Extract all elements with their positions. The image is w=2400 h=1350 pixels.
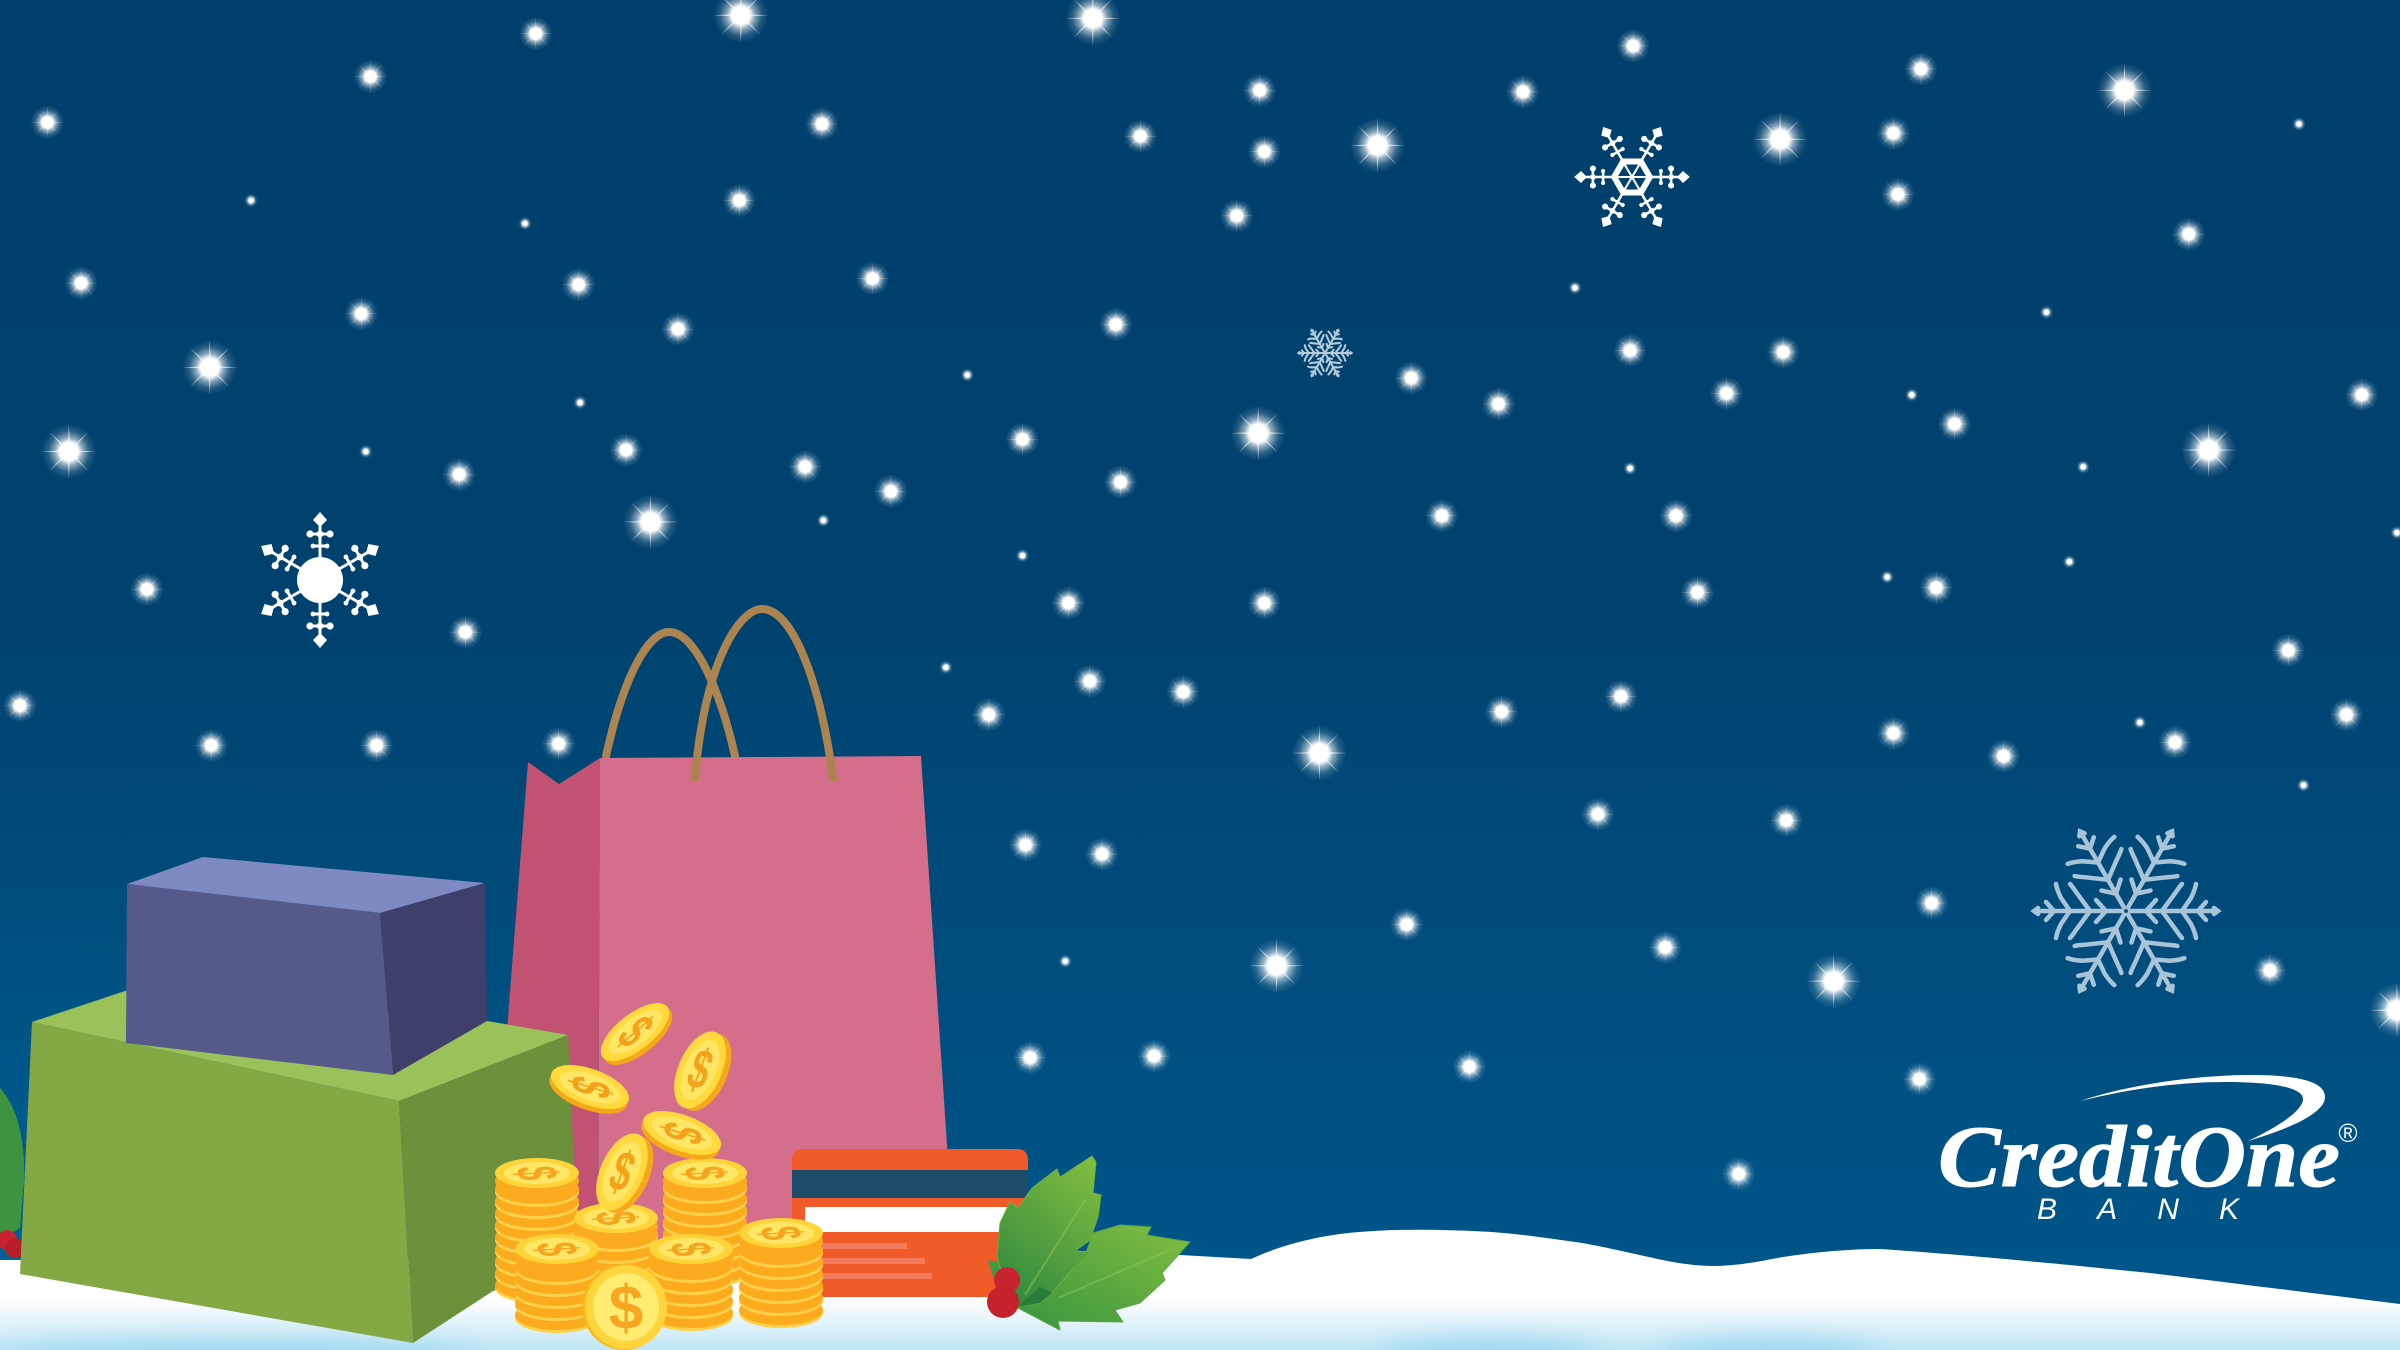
small leaf behind berries	[988, 1260, 1003, 1287]
stack back right	[663, 1158, 747, 1288]
bag back handle	[606, 632, 735, 756]
logo wordmark: CreditOne	[1938, 1109, 2340, 1206]
icon: small blue snowflake	[1298, 326, 1352, 380]
upright dollar coin	[582, 1264, 667, 1350]
shopping bag	[507, 609, 948, 1280]
dark leaf shading	[1018, 1287, 1052, 1307]
snow ground	[0, 1230, 2400, 1350]
credit card	[792, 1149, 1028, 1297]
front leaf	[997, 1156, 1101, 1307]
signature strip	[805, 1207, 1011, 1232]
bag front panel	[598, 756, 948, 1280]
card text lines	[805, 1243, 932, 1279]
logo sub-word BANK: BANK	[2037, 1193, 2241, 1226]
back leaf	[1018, 1225, 1190, 1330]
bag side panel	[507, 758, 600, 1240]
logo swoosh	[2080, 1075, 2325, 1141]
falling coins	[544, 993, 742, 1221]
stack back middle	[574, 1203, 658, 1300]
icon: white snowflake left with solid centre	[254, 512, 386, 648]
stack front left	[515, 1234, 599, 1333]
logo: Credit One Bank	[1938, 1075, 2358, 1226]
registered mark: ®	[2338, 1118, 2358, 1148]
berries	[987, 1267, 1020, 1318]
bag front handle	[695, 609, 833, 778]
coin stacks	[495, 1158, 823, 1333]
icon: large pale snowflake	[2034, 818, 2218, 1004]
stack right	[739, 1218, 823, 1328]
icon: white snowflake top centre	[1574, 121, 1690, 233]
stack front middle	[649, 1234, 733, 1331]
holly sprig beside card	[987, 1156, 1190, 1330]
upright dollar coin: $	[609, 1274, 643, 1343]
leaf veins	[1025, 1200, 1170, 1298]
stack back left	[495, 1158, 579, 1303]
magnetic stripe	[792, 1170, 1028, 1198]
holly sprig at left edge	[0, 1088, 25, 1258]
purple gift box	[126, 857, 487, 1075]
green gift box	[20, 991, 574, 1343]
